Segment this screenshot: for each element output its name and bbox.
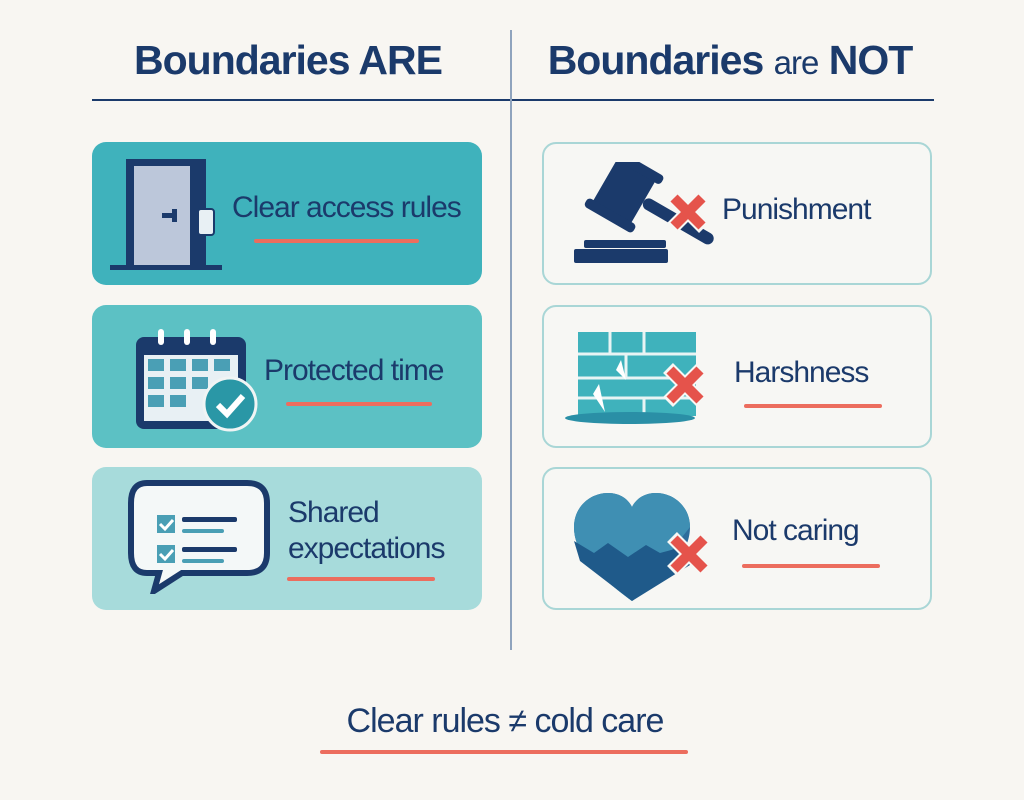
title: boundaries are: Boundaries ARE	[134, 37, 442, 83]
label: Shared	[288, 496, 379, 529]
label: Harshness	[734, 356, 868, 389]
panel: shared expectations	[92, 467, 482, 610]
panel: not caring	[542, 467, 932, 610]
panel: punishment	[542, 142, 932, 285]
label: Protected time	[264, 354, 443, 387]
icon: heart with x	[574, 493, 708, 601]
label: expectations	[288, 532, 444, 565]
label	[288, 496, 444, 565]
icon: wall with x	[565, 332, 704, 424]
label: Not caring	[732, 514, 859, 547]
footer tagline	[320, 702, 688, 754]
icon: calendar	[136, 329, 258, 432]
title: boundaries are not: Boundaries are NOT	[548, 37, 912, 83]
label: Punishment	[722, 193, 870, 226]
footer tagline: Clear rules ≠ cold care	[347, 702, 663, 740]
panel: clear access rules	[92, 142, 482, 285]
panel: protected time	[92, 305, 482, 448]
icon: gavel with x	[574, 162, 714, 263]
icon: speech bubble checklist	[128, 480, 270, 594]
panel: harshness	[542, 305, 932, 448]
label: Clear access rules	[232, 191, 461, 224]
icon: door	[110, 159, 222, 270]
